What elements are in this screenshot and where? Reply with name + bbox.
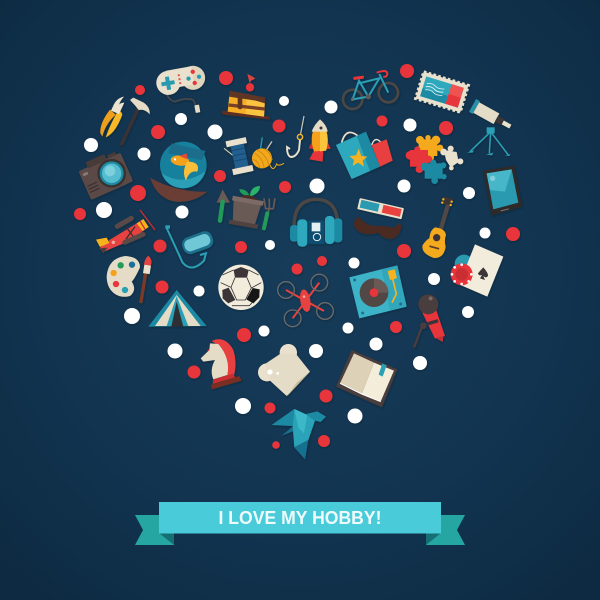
icon: headphones and mp3 player (290, 199, 342, 247)
icon: bicycle (343, 71, 398, 109)
icon: acoustic guitar (422, 196, 453, 258)
icon: thread spool (224, 137, 254, 175)
icon: biplane (96, 210, 155, 254)
icon: tablet (483, 166, 522, 216)
icon: fishing lure (309, 119, 331, 162)
heart of hobby icons (74, 64, 522, 459)
icon: chess knight (201, 339, 242, 389)
icon: turntable (349, 265, 407, 318)
icon: origami bird (272, 409, 326, 459)
scattered red and white dots (74, 64, 520, 449)
icon: 3D glasses (357, 198, 404, 219)
icon: cake with cherry (222, 74, 270, 120)
icon: fishbowl with goldfish (150, 142, 207, 202)
icon: hammer (122, 98, 150, 144)
right ribbon tail (426, 515, 465, 545)
icon: puzzle pieces (406, 135, 463, 184)
icon: shopping bags (336, 132, 393, 179)
icon: garden trowel (217, 189, 230, 221)
icon: camera (76, 148, 133, 200)
icon: potted sprout (228, 186, 264, 229)
left ribbon tail (135, 515, 174, 545)
icon: moustache (354, 217, 401, 239)
icon: garden fork (264, 198, 275, 228)
icon: camping tent (148, 290, 207, 327)
ribbon banner (135, 502, 465, 545)
icon: playing card and poker chips (451, 244, 503, 297)
banner title: I LOVE MY HOBBY! (218, 507, 382, 528)
icon: microphone (414, 294, 445, 347)
icon: paint brush (141, 256, 152, 302)
icon: telescope (467, 99, 514, 156)
icon: open book with bookmark (336, 350, 397, 407)
icon: pliers (100, 97, 124, 137)
icon: fishing hook (287, 116, 304, 157)
icon: soccer ball (218, 265, 264, 310)
icon: snorkel and mask (165, 225, 215, 268)
icon: game controller (154, 64, 207, 113)
icon: yarn ball and needles (252, 137, 284, 169)
icon: quadcopter drone (278, 274, 333, 327)
icon: postage stamp (416, 72, 468, 112)
ribbon band (159, 502, 441, 534)
icon: paint palette (107, 256, 140, 297)
icon: chef hat (258, 344, 310, 396)
